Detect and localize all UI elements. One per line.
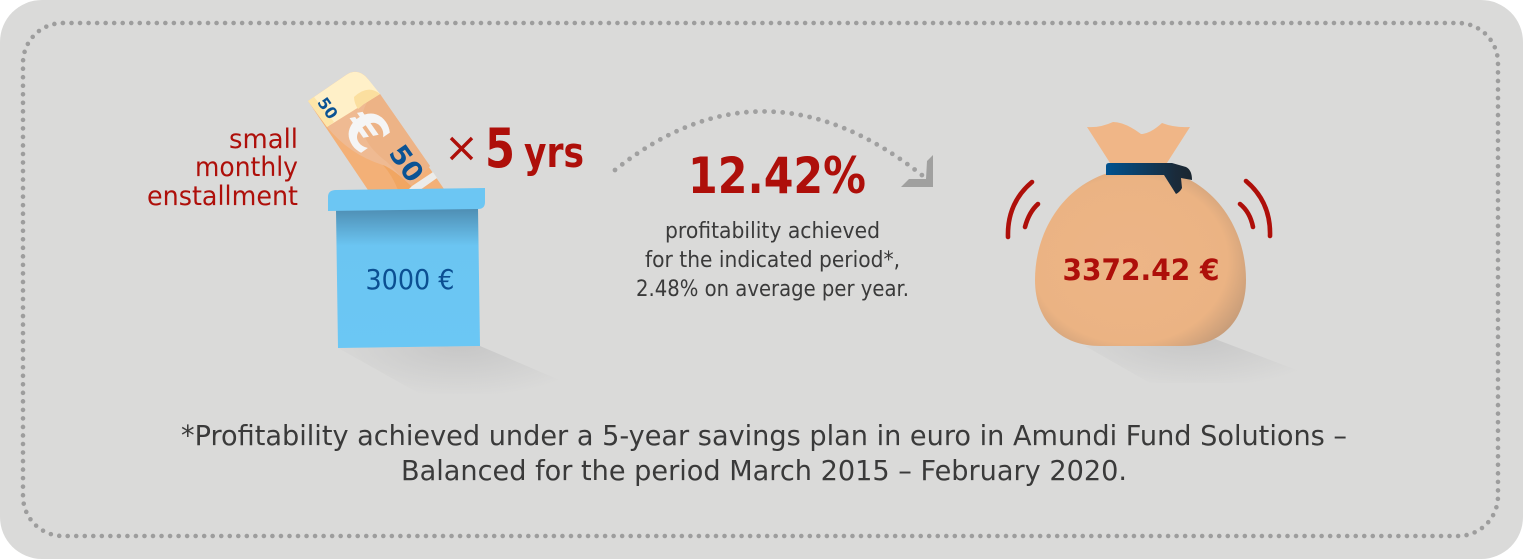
label: small monthly enstallment bbox=[147, 124, 298, 212]
euro symbol: € bbox=[328, 96, 402, 164]
shadow: box bbox=[338, 346, 592, 394]
multiplier: x 5 yrs bbox=[451, 117, 584, 180]
shadow: bag bbox=[1085, 339, 1331, 383]
description text bbox=[636, 219, 909, 302]
footnote bbox=[181, 419, 1347, 487]
label: small monthly enstallment: monthly bbox=[195, 152, 298, 183]
multiplier: x 5 yrs: 5 bbox=[485, 117, 515, 180]
label: small monthly enstallment: small bbox=[229, 124, 298, 155]
icon: blue box bbox=[328, 188, 485, 348]
description text: profitability achieved bbox=[665, 219, 880, 244]
multiplier: x 5 yrs: yrs bbox=[524, 128, 584, 177]
footnote: *Profitability achieved under a 5-year savings plan in euro in Amundi Fund Solutions – bbox=[181, 419, 1347, 452]
arrow: dotted arc bbox=[615, 111, 933, 187]
box amount: 3000 € bbox=[366, 263, 454, 296]
icon: money bag bbox=[1035, 122, 1246, 346]
icon: vibration lines right bbox=[1240, 181, 1270, 236]
description text: for the indicated period*, bbox=[645, 248, 900, 273]
footnote: Balanced for the period March 2015 – February 2020. bbox=[401, 454, 1127, 487]
label: small monthly enstallment: enstallment bbox=[147, 181, 298, 212]
bag amount: 3372.42 € bbox=[1062, 253, 1220, 287]
big 50: 50 bbox=[382, 139, 429, 188]
small 50: 50 bbox=[313, 94, 342, 123]
icon: banknote bbox=[308, 72, 444, 190]
heading: 12.42%: 12.42% bbox=[688, 147, 866, 205]
description text: 2.48% on average per year. bbox=[636, 277, 909, 302]
icon: vibration lines left bbox=[1008, 182, 1038, 237]
